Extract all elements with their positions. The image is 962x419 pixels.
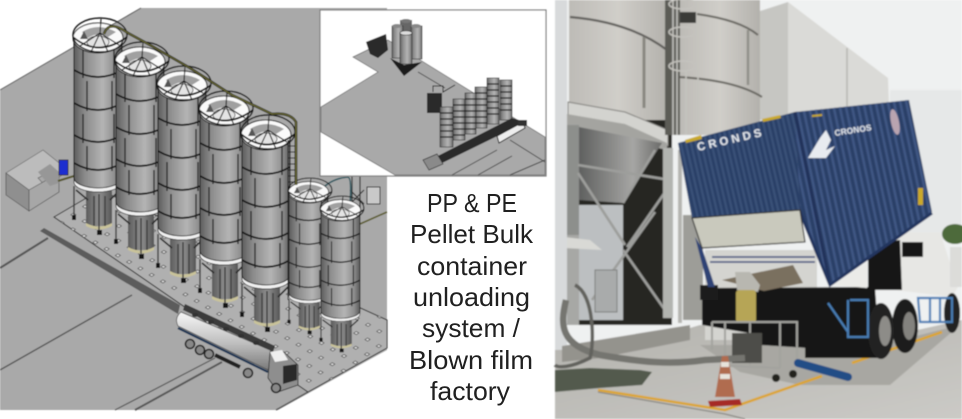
silo 1 bbox=[72, 18, 127, 235]
ladder on silo 5 bbox=[288, 140, 295, 300]
small silo 7 bbox=[319, 196, 364, 352]
small building with blue unit bbox=[6, 150, 74, 211]
container lettering: CRONDS bbox=[696, 127, 766, 154]
blue truck guards bbox=[828, 298, 952, 337]
hatch panel bbox=[692, 210, 805, 248]
panel: photograph of container unloading bbox=[555, 0, 962, 419]
factory building bbox=[757, 2, 889, 120]
inset ground bbox=[321, 40, 545, 175]
distant haze on sky bbox=[890, 90, 962, 240]
ground bbox=[555, 320, 962, 419]
tanker truck bbox=[177, 304, 298, 392]
panel: inset overview model bbox=[320, 10, 546, 176]
yellow floor lines bbox=[598, 332, 942, 410]
caption: PP & PE bbox=[427, 188, 517, 218]
wheels bbox=[868, 293, 960, 359]
trench bbox=[40, 228, 180, 314]
ground plane bbox=[0, 8, 387, 410]
overhead pipe bbox=[104, 26, 296, 185]
truck rear body bbox=[700, 250, 880, 358]
process equipment behind small silos bbox=[325, 176, 387, 224]
road markings bbox=[0, 8, 308, 410]
silo 3 bbox=[156, 66, 211, 283]
caption: unloading bbox=[413, 282, 530, 312]
ladder and cage bbox=[665, 0, 698, 135]
inset silo row bbox=[423, 78, 527, 170]
caption: system / bbox=[422, 313, 521, 343]
silo 4 bbox=[198, 91, 253, 308]
traffic cone bbox=[708, 356, 742, 407]
caption: Pellet Bulk bbox=[410, 219, 534, 249]
panel: 3D model of silo plant bbox=[0, 8, 387, 410]
silo 2 bbox=[114, 42, 169, 259]
container lettering bbox=[696, 122, 872, 158]
discharge chute bbox=[722, 265, 803, 323]
shipping container bbox=[678, 100, 932, 287]
rear silo bbox=[678, 0, 762, 135]
tree bbox=[942, 224, 962, 244]
caption bbox=[409, 188, 534, 406]
caption: Blown film bbox=[409, 345, 533, 375]
concrete pad with anchor bolts bbox=[54, 190, 387, 392]
silo 5 bbox=[240, 115, 295, 332]
inset road lines bbox=[418, 72, 545, 175]
truck cab bbox=[833, 232, 962, 297]
container lettering: CRONOS bbox=[834, 122, 872, 138]
caption: factory bbox=[430, 376, 510, 406]
left column bbox=[555, 0, 567, 360]
blue discharge pipe bbox=[798, 363, 848, 377]
main silo bbox=[569, 0, 667, 125]
inset upper equipment bbox=[366, 34, 388, 58]
tarp bbox=[555, 368, 652, 392]
inset upper silos bbox=[390, 19, 422, 76]
silo support frame and interior bbox=[564, 102, 703, 325]
flexible hose bbox=[563, 300, 745, 362]
small silo 6 bbox=[287, 178, 332, 334]
caption: container bbox=[417, 251, 527, 281]
unloading skid frame bbox=[712, 322, 797, 368]
floor shadow bbox=[700, 325, 960, 385]
